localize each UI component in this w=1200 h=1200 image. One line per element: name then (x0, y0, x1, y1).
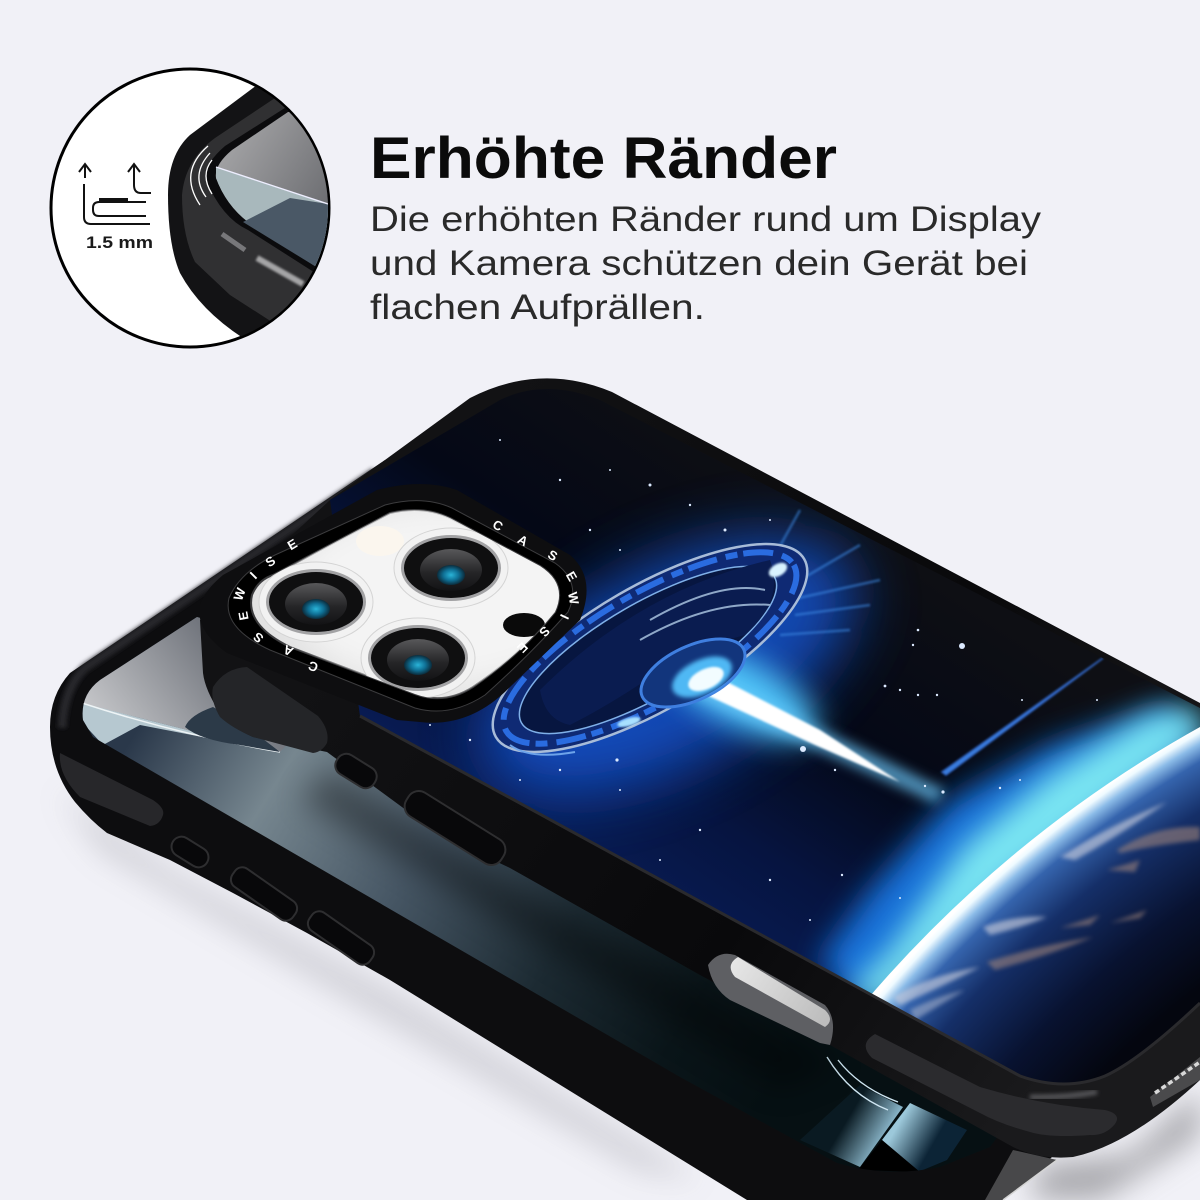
charging port (708, 954, 833, 1045)
inset highlight (222, 234, 245, 250)
front phone screen (330, 389, 1200, 1084)
front phone left bumper band (212, 667, 328, 753)
front phone frame (200, 378, 1200, 1158)
back screen dark shape (185, 707, 280, 752)
back screen top grey (84, 617, 285, 752)
back phone (50, 460, 1060, 1200)
camera ring lettering: E (563, 569, 580, 584)
camera ring lettering: I (557, 612, 572, 622)
camera ring lettering (230, 517, 582, 675)
inset circle: raised edge close-up (51, 69, 329, 347)
front buttons (332, 750, 510, 870)
camera ring lettering: W (230, 585, 249, 603)
camera lettering ring (228, 501, 573, 711)
planet (872, 727, 1200, 1082)
camera ring lettering: S (250, 629, 266, 646)
inset sound arcs (191, 146, 212, 205)
stars (429, 439, 1098, 921)
camera ring lettering: E (514, 639, 531, 656)
camera ring lettering: W (565, 591, 582, 606)
camera plate (251, 510, 559, 698)
camera ring lettering: A (515, 532, 531, 550)
heading: Erhöhte Ränder (370, 126, 837, 191)
UFO rays (775, 510, 880, 635)
back phone bottom sliver (985, 1150, 1057, 1200)
inset screen (216, 112, 328, 268)
UFO glow (442, 480, 898, 850)
back phone corner bumper highlight (60, 753, 163, 826)
planet clouds (893, 802, 1167, 1020)
camera ring lettering: S (536, 623, 553, 640)
UFO beam (695, 668, 945, 803)
lens 3 (361, 618, 475, 698)
UFO saucer (492, 542, 808, 756)
ground shadows (60, 790, 1200, 1200)
body text (370, 200, 1042, 327)
front phone inner rim (360, 716, 1200, 1084)
camera ring lettering: S (262, 553, 278, 570)
lidar (503, 613, 545, 637)
camera ring lettering: I (247, 569, 260, 582)
front phone (200, 378, 1200, 1200)
back screen light wedge (82, 704, 204, 744)
camera ring lettering: E (235, 610, 252, 621)
camera ring lettering: S (545, 547, 561, 564)
front phone shadow (300, 770, 840, 1090)
inset icon: raised edge diagram (79, 164, 151, 224)
camera module (199, 484, 590, 723)
body text: flachen Aufprällen. (370, 288, 705, 327)
screen: thin horizon streak (942, 658, 1103, 775)
body text: und Kamera schützen dein Gerät bei (370, 244, 1028, 283)
back phone frame (50, 460, 1060, 1200)
back screen scene at corner (800, 1085, 903, 1167)
camera outer bump (199, 484, 587, 723)
flash (356, 526, 394, 542)
back phone screen (83, 617, 1010, 1172)
lens 2 (394, 528, 508, 608)
camera ring lettering: C (490, 517, 506, 535)
back phone buttons (168, 833, 378, 968)
body text: Die erhöhten Ränder rund um Display (370, 200, 1042, 239)
camera ring lettering: A (280, 642, 296, 659)
screen: cyan atmosphere band (850, 708, 1200, 1010)
screen: blue atmosphere glow (820, 705, 1200, 1010)
lens 1 (259, 562, 373, 642)
front speaker grille (1150, 1057, 1200, 1107)
camera ring lettering: E (285, 536, 300, 553)
front corner bumper band (866, 1034, 1117, 1136)
camera ring lettering: C (306, 658, 320, 675)
inset phone corner bumper (168, 86, 312, 336)
inset label: 1.5 mm (86, 233, 153, 252)
